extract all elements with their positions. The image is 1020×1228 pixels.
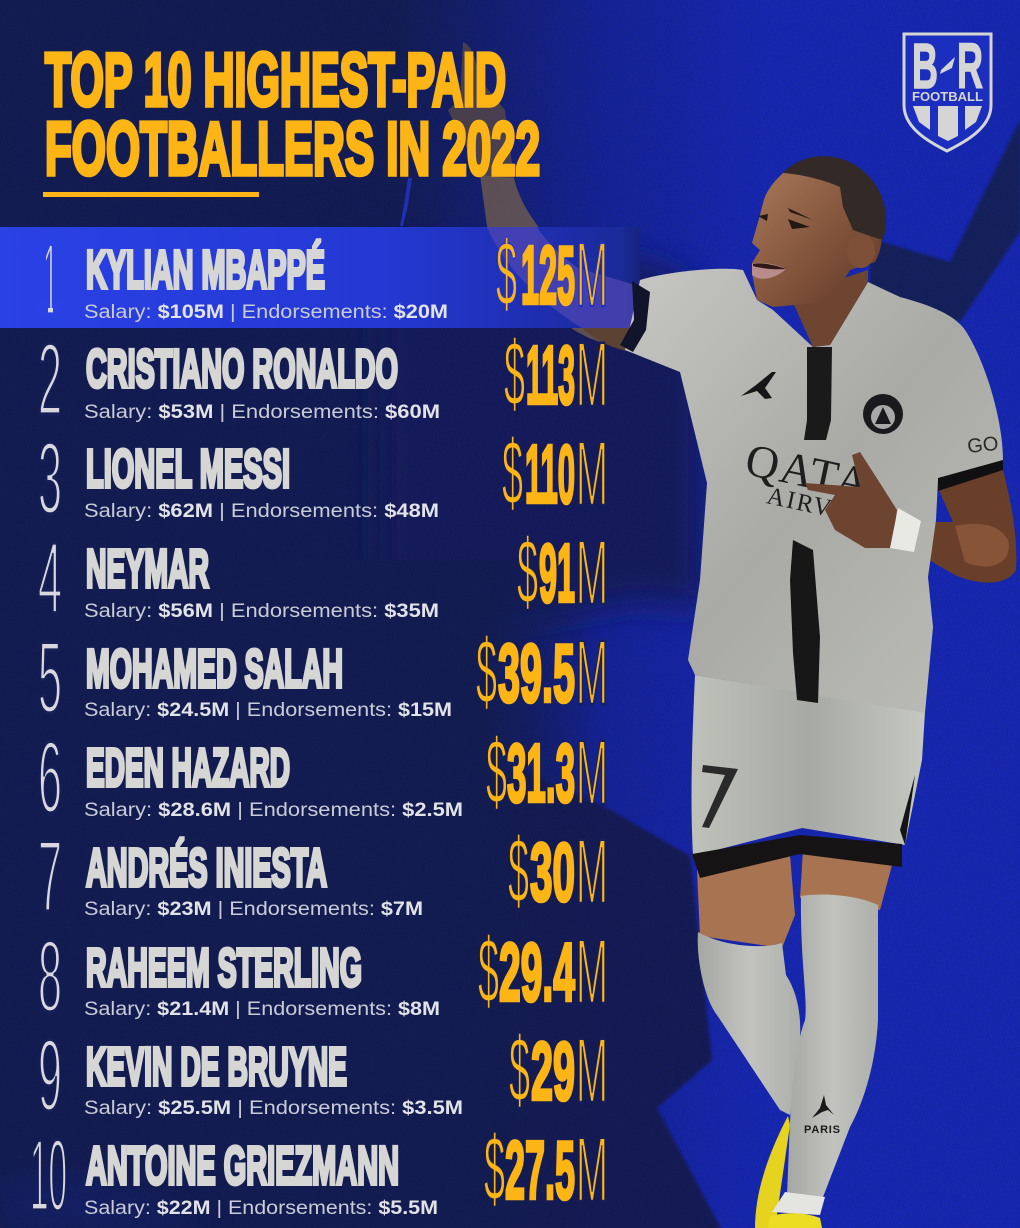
sleeve text: GO bbox=[966, 433, 999, 458]
row 5: Salary: $24.5M | Endorsements: $15M bbox=[84, 700, 452, 721]
row 8: RAHEEM STERLING bbox=[86, 938, 362, 998]
row 6: Salary: $28.6M | Endorsements: $2.5M bbox=[84, 800, 463, 821]
text: M bbox=[576, 224, 608, 326]
brand icon bbox=[741, 372, 776, 399]
row 1: 1 bbox=[43, 224, 58, 336]
logo: B/R Football shield: FOOTBALL bbox=[912, 90, 983, 104]
row 1: $ bbox=[496, 223, 517, 325]
row 3: LIONEL MESSI bbox=[86, 439, 290, 499]
player figure bbox=[620, 156, 1016, 1228]
row 1: Salary: $105M | Endorsements: $20M bbox=[84, 302, 448, 323]
text: M bbox=[576, 423, 608, 525]
row 7 bbox=[38, 820, 608, 933]
row 2: 113 bbox=[526, 328, 575, 422]
near leg bbox=[800, 850, 892, 910]
row 4 bbox=[38, 521, 608, 635]
row 7: 7 bbox=[38, 821, 62, 933]
row 10: $ bbox=[484, 1118, 505, 1220]
row 2: Salary: $53M | Endorsements: $60M bbox=[84, 402, 440, 423]
forearm under band bbox=[582, 328, 632, 352]
row 9 bbox=[38, 1019, 608, 1132]
row 6: 6 bbox=[38, 722, 62, 834]
title bbox=[45, 38, 540, 190]
title underline bbox=[43, 192, 259, 197]
sponsor: QATA bbox=[741, 434, 876, 510]
row 2: CRISTIANO RONALDO bbox=[86, 339, 398, 399]
sleeve cuffs bbox=[620, 281, 650, 352]
row 2 bbox=[38, 323, 608, 436]
text: M bbox=[576, 522, 608, 624]
row 6 bbox=[38, 721, 608, 834]
mouth bbox=[752, 263, 786, 279]
row 5: MOHAMED SALAH bbox=[86, 639, 343, 699]
text: M bbox=[576, 1119, 608, 1221]
row 5: $ bbox=[476, 621, 497, 723]
row 7: $ bbox=[508, 820, 529, 922]
row 4: Salary: $56M | Endorsements: $35M bbox=[84, 601, 439, 622]
shorts bbox=[692, 675, 925, 856]
logo: B/R Football shield: B bbox=[912, 30, 938, 102]
row 1: 125 bbox=[521, 228, 575, 322]
row 9: Salary: $25.5M | Endorsements: $3.5M bbox=[84, 1098, 463, 1119]
text: M bbox=[576, 722, 608, 824]
far leg bbox=[697, 855, 795, 948]
row 9: KEVIN DE BRUYNE bbox=[86, 1037, 347, 1097]
ear bbox=[847, 234, 875, 268]
eyes and brows bbox=[758, 208, 813, 229]
row 4: 91 bbox=[539, 526, 575, 620]
row 10 bbox=[30, 1118, 608, 1228]
row 10: 27.5 bbox=[505, 1124, 575, 1216]
club crest bbox=[863, 394, 903, 434]
row 10: Salary: $22M | Endorsements: $5.5M bbox=[84, 1198, 438, 1219]
row 8: $ bbox=[478, 920, 499, 1022]
row 4: 4 bbox=[38, 523, 62, 635]
row 3 bbox=[38, 422, 608, 535]
text: M bbox=[576, 921, 608, 1023]
row 6: EDEN HAZARD bbox=[86, 738, 290, 798]
wristband bbox=[890, 508, 921, 552]
highlight band bbox=[0, 227, 640, 328]
row 8 bbox=[38, 920, 608, 1033]
head bbox=[752, 166, 882, 307]
row 9: 29 bbox=[531, 1024, 575, 1118]
right arm bbox=[915, 470, 1016, 583]
row 9: 9 bbox=[38, 1020, 62, 1132]
row 8: Salary: $21.4M | Endorsements: $8M bbox=[84, 999, 440, 1020]
title: TOP 10 HIGHEST-PAID bbox=[45, 38, 506, 122]
row 5: 5 bbox=[38, 622, 62, 734]
row 6: 31.3 bbox=[507, 726, 575, 820]
logo: B/R Football shield: R bbox=[957, 30, 983, 102]
title: FOOTBALLERS IN 2022 bbox=[45, 106, 540, 190]
row 8: 29.4 bbox=[499, 926, 575, 1018]
text: M bbox=[576, 821, 608, 923]
row 3: 110 bbox=[525, 428, 575, 520]
row 4: $ bbox=[517, 521, 538, 623]
arm seen through band bbox=[487, 227, 640, 328]
row 7: ANDRÉS INIESTA bbox=[86, 838, 327, 898]
text: M bbox=[576, 1020, 608, 1122]
sponsor: AIRV bbox=[764, 482, 836, 523]
row 1: KYLIAN MBAPPÉ bbox=[86, 240, 325, 300]
raised hand behind title bbox=[448, 42, 514, 178]
shirt number bbox=[702, 765, 738, 828]
shin logo: PARIS bbox=[804, 1124, 840, 1136]
row 7: 30 bbox=[530, 826, 575, 918]
hand bbox=[805, 452, 897, 548]
row 5: 39.5 bbox=[498, 626, 575, 720]
row 8: 8 bbox=[38, 921, 62, 1033]
row 1 bbox=[38, 223, 608, 336]
row 2: $ bbox=[504, 323, 525, 425]
row 7: Salary: $23M | Endorsements: $7M bbox=[84, 899, 423, 920]
neck bbox=[790, 270, 868, 347]
logo: B/R Football shield bbox=[904, 30, 991, 151]
hair bbox=[783, 156, 886, 240]
text: M bbox=[576, 622, 608, 724]
row 4: NEYMAR bbox=[86, 539, 209, 599]
row 3: $ bbox=[502, 422, 523, 524]
row 3: Salary: $62M | Endorsements: $48M bbox=[84, 501, 439, 522]
row 6: $ bbox=[486, 721, 507, 823]
row 3: 3 bbox=[38, 423, 62, 535]
row 9: $ bbox=[509, 1019, 530, 1121]
row 2: 2 bbox=[38, 324, 62, 436]
jersey bbox=[625, 269, 1003, 713]
placket stripe bbox=[804, 347, 832, 440]
text: M bbox=[576, 324, 608, 426]
raised arm bbox=[480, 175, 640, 352]
row 10: ANTOINE GRIEZMANN bbox=[86, 1136, 399, 1196]
row 5 bbox=[38, 621, 608, 734]
